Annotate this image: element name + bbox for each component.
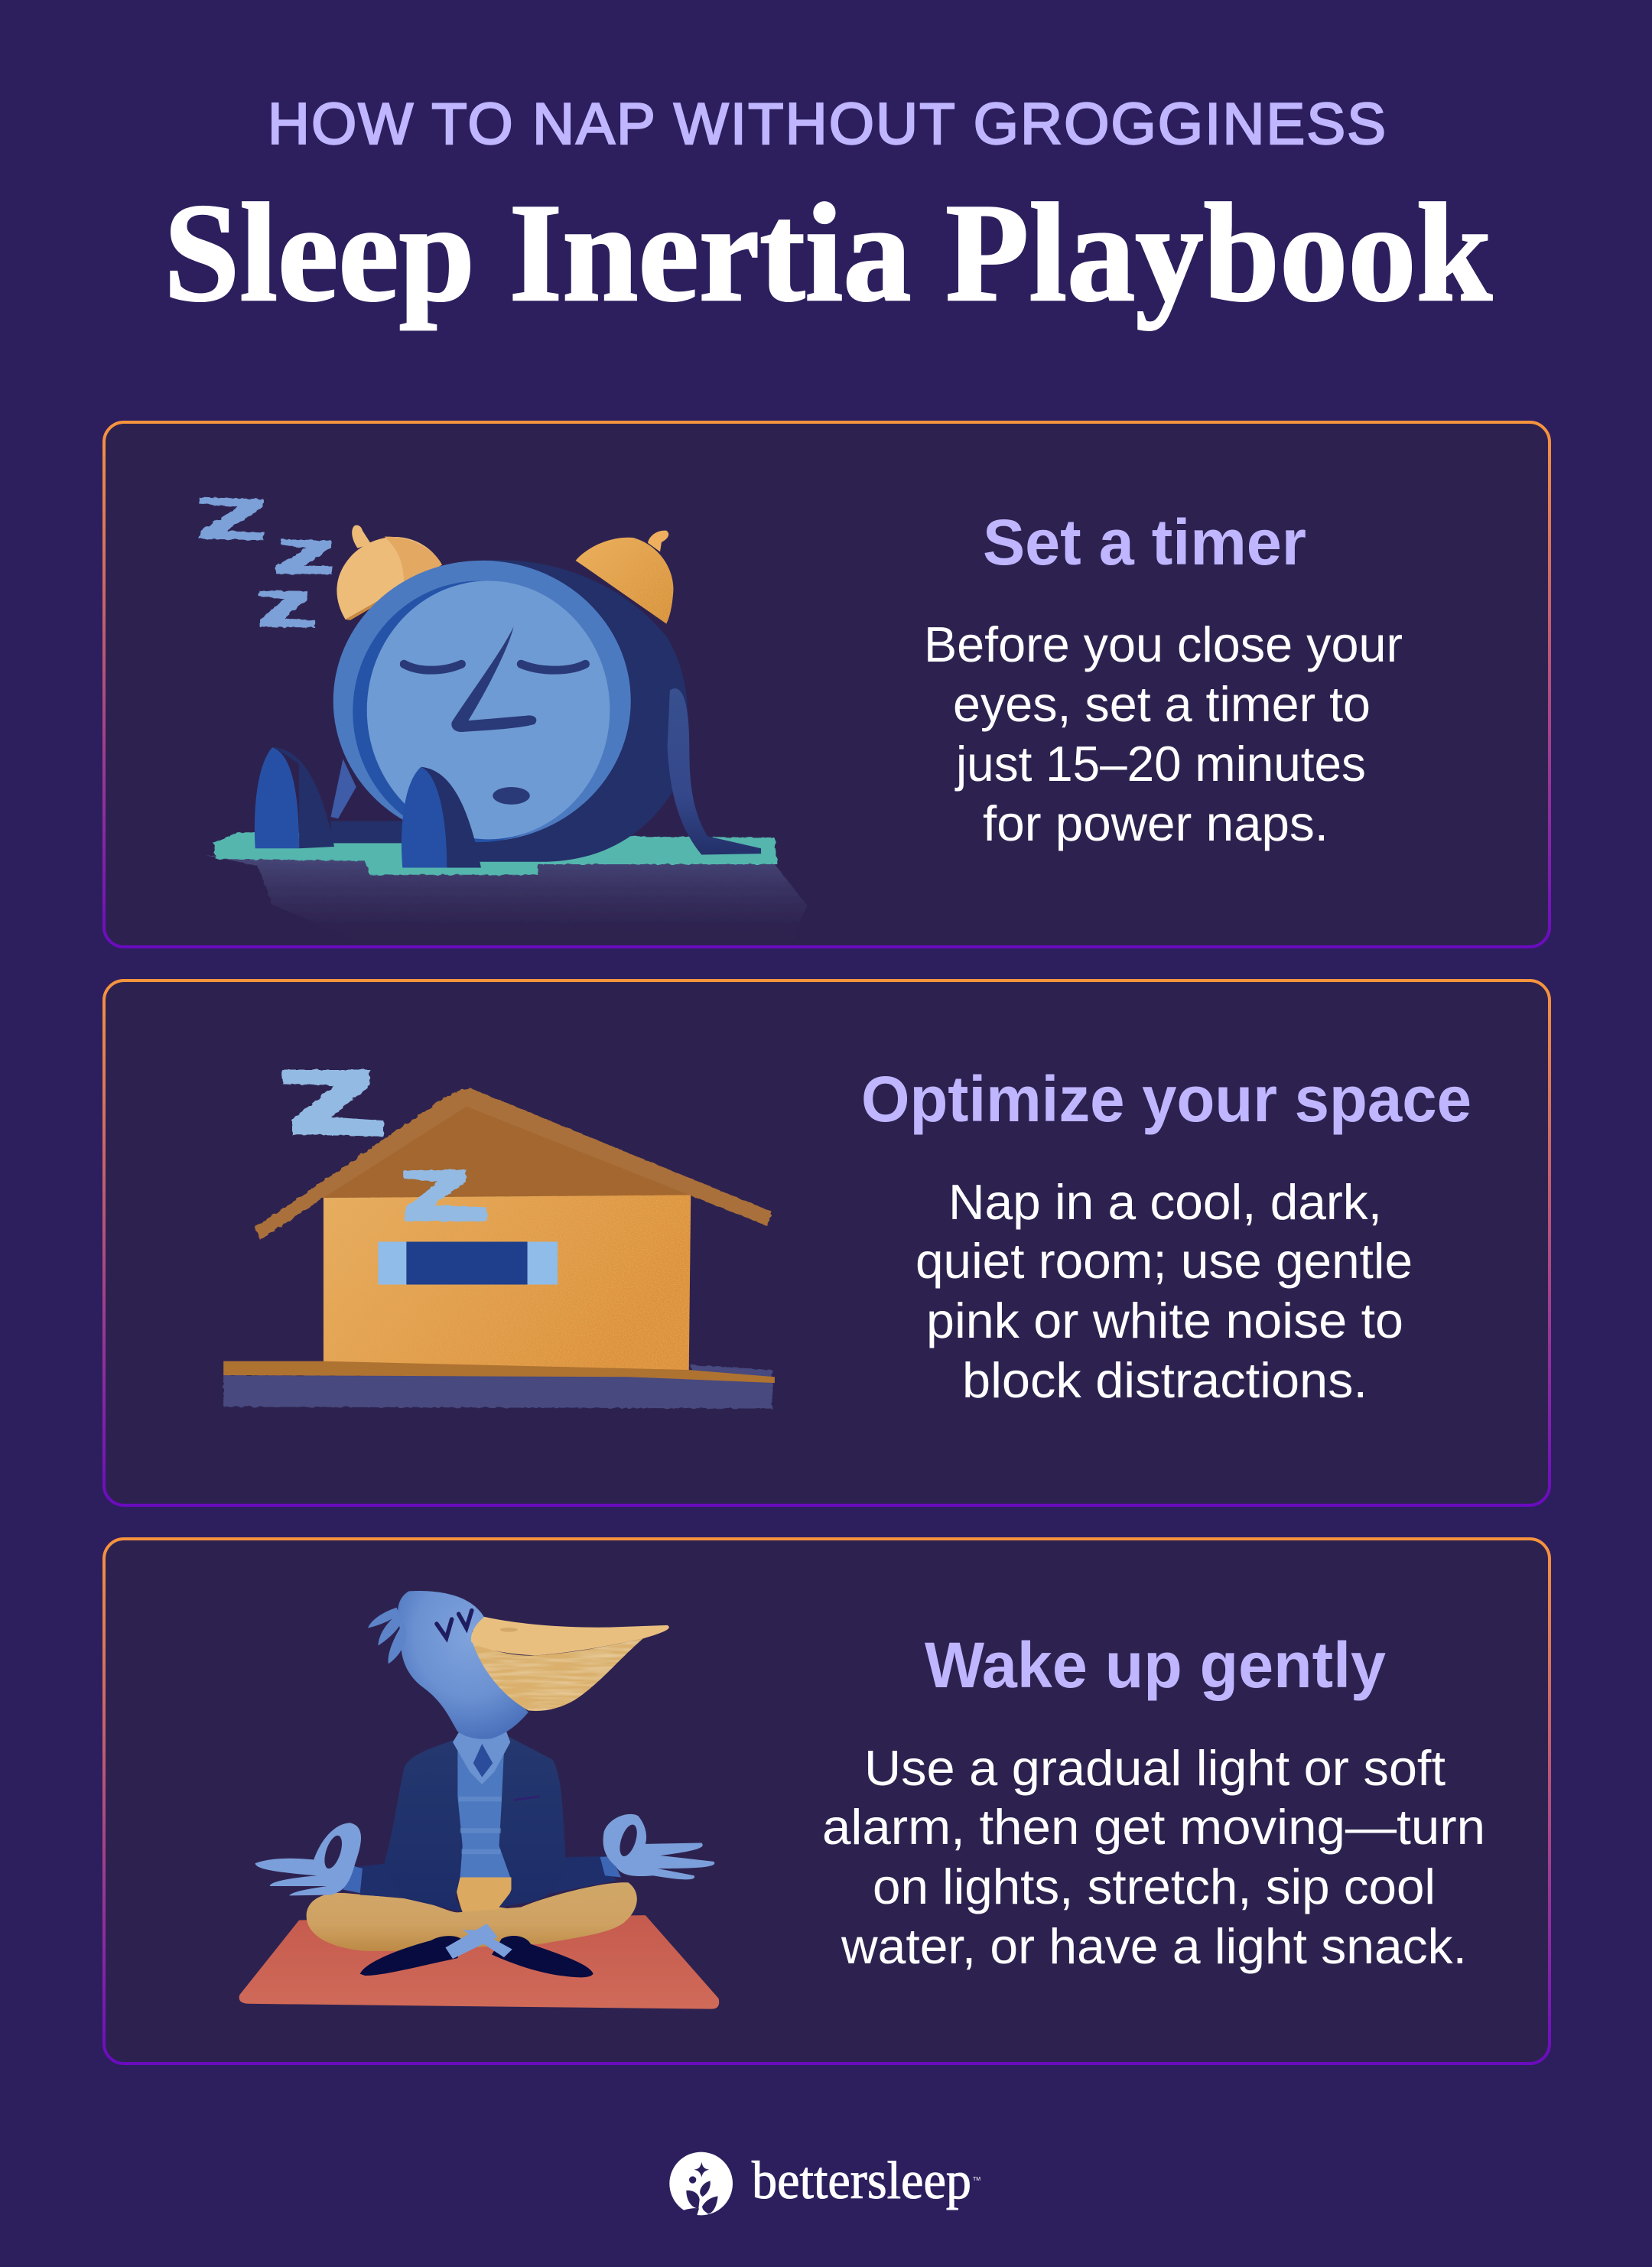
jacket xyxy=(385,1737,565,1912)
body text: wake up gently: water, or have a light snack. xyxy=(841,1918,1467,1974)
crest feathers xyxy=(368,1608,406,1664)
arm xyxy=(331,759,356,818)
wall xyxy=(324,1195,691,1371)
body text: wake up gently: on lights, stretch, sip cool xyxy=(873,1859,1436,1914)
hand left xyxy=(255,1823,361,1895)
cuffs xyxy=(343,1856,621,1893)
ground shadow xyxy=(206,855,806,940)
beak pouch xyxy=(471,1638,643,1711)
gable xyxy=(324,1107,689,1198)
body text: optimize your space: block distractions. xyxy=(962,1352,1367,1408)
clock body back xyxy=(463,560,688,862)
heading: wake up gently: Wake up gently xyxy=(925,1629,1386,1701)
pocket xyxy=(514,1797,540,1800)
arm left xyxy=(358,1862,416,1898)
collar and tie xyxy=(453,1732,510,1784)
body text: set a timer: just 15–20 minutes xyxy=(954,736,1366,792)
body text: set a timer: eyes, set a timer to xyxy=(953,676,1371,732)
grass mat xyxy=(213,833,777,875)
panel: optimize your space xyxy=(104,981,1550,1505)
body text: optimize your space: pink or white noise to xyxy=(926,1293,1403,1348)
clock face xyxy=(367,581,610,839)
roof xyxy=(255,1088,772,1240)
arm right xyxy=(538,1856,616,1895)
crossed legs xyxy=(307,1875,637,1951)
tail xyxy=(668,688,761,855)
panel: wake up gently xyxy=(104,1539,1550,2064)
illustration: sleeping house xyxy=(223,1070,775,1409)
heading: set a timer: Set a timer xyxy=(983,506,1306,578)
illustration: meditating pelican xyxy=(239,1591,719,2009)
logo: bettersleep xyxy=(669,2152,980,2217)
head and neck xyxy=(398,1591,528,1739)
nostril xyxy=(500,1628,518,1632)
z letters xyxy=(282,1070,487,1221)
body text: wake up gently: alarm, then get moving—turn xyxy=(822,1799,1485,1855)
crossed feet xyxy=(445,1924,512,1959)
body text: set a timer: Before you close your xyxy=(924,616,1403,672)
body text: optimize your space xyxy=(915,1174,1413,1408)
body text: wake up gently: Use a gradual light or soft xyxy=(864,1740,1446,1796)
logo icon xyxy=(669,2152,733,2217)
clock rim xyxy=(333,561,631,841)
body text: optimize your space: quiet room; use gentle xyxy=(915,1233,1413,1289)
body text: wake up gently xyxy=(822,1740,1485,1974)
yoga mat xyxy=(239,1915,719,2009)
body text: set a timer: for power naps. xyxy=(983,795,1328,851)
front foot xyxy=(402,767,481,868)
body text: optimize your space: Nap in a cool, dark, xyxy=(948,1174,1382,1230)
back leg and foot xyxy=(255,747,409,848)
wordmark: bettersleep xyxy=(752,2152,971,2210)
title: Sleep Inertia Playbook xyxy=(164,174,1493,330)
trademark: TM xyxy=(973,2177,980,2182)
sleeping face xyxy=(404,626,585,805)
illustration: sleeping alarm clock xyxy=(199,497,806,940)
left bell xyxy=(337,525,442,620)
z letters xyxy=(199,497,333,628)
floor strip xyxy=(223,1361,775,1383)
eyebrow heading: HOW TO NAP WITHOUT GROGGINESS xyxy=(268,92,1386,157)
right bell xyxy=(576,531,673,623)
sweater xyxy=(457,1751,510,1878)
panel: set a timer xyxy=(104,422,1550,947)
beak upper xyxy=(471,1617,669,1655)
shoes xyxy=(360,1936,593,1977)
heading: optimize your space: Optimize your space xyxy=(861,1063,1472,1135)
ground xyxy=(223,1364,772,1409)
closed eyes xyxy=(437,1611,472,1638)
body text: set a timer xyxy=(924,616,1403,851)
hand right xyxy=(603,1814,714,1879)
window xyxy=(378,1242,558,1285)
